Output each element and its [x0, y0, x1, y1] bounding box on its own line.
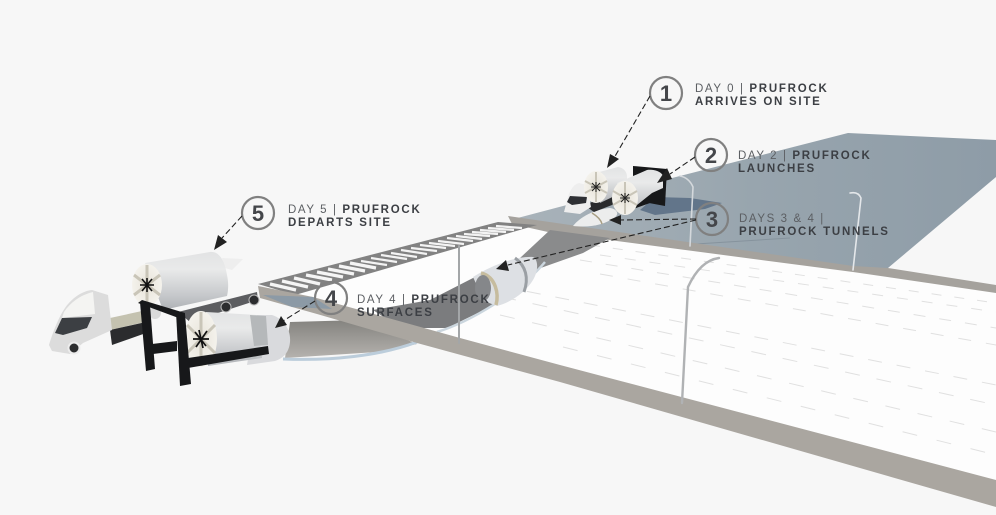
cutter spokes: [187, 312, 215, 366]
arrow 3b: [496, 220, 696, 271]
frame panel: [633, 166, 667, 206]
badge 4: [315, 282, 347, 314]
frame long beam: [188, 346, 269, 368]
truck chassis: [584, 190, 630, 212]
trench upper section: [373, 262, 535, 328]
trench edge highlight upper: [437, 262, 545, 332]
cutter head: [584, 171, 608, 203]
lamp posts: [459, 176, 861, 403]
badge 5: [242, 197, 274, 229]
machine body: [617, 170, 663, 213]
callout 1: [607, 77, 829, 168]
truck hood highlight: [62, 292, 95, 318]
label 2: LAUNCHES: [738, 163, 816, 175]
road surface: [262, 226, 996, 482]
lamp post on road: [682, 258, 719, 403]
arrow 2: [657, 157, 695, 183]
label 3: DAYS 3 & 4 |: [739, 213, 825, 225]
crosswalk: [258, 222, 537, 295]
cutter spokes: [585, 172, 607, 202]
arrow 4: [275, 301, 315, 328]
entrance tube: [573, 208, 617, 227]
curb along launch site: [508, 216, 996, 293]
callout 2: [657, 139, 872, 183]
ring: [250, 315, 268, 346]
badge 2: 2: [705, 143, 717, 168]
badge 3: 3: [706, 207, 718, 232]
cutter hub: [591, 182, 601, 192]
label 4: SURFACES: [357, 307, 434, 319]
badge 4: 4: [325, 286, 338, 311]
label 5: DEPARTS SITE: [288, 217, 392, 229]
arrow 1: [607, 96, 650, 168]
badge 1: [650, 77, 682, 109]
tube ring: [481, 273, 497, 305]
truck cab: [564, 183, 591, 214]
frame top bar: [138, 300, 185, 320]
frame rear leg: [140, 302, 155, 371]
cutter hub: [140, 278, 154, 292]
shadow patch: [263, 295, 332, 309]
frame front leg: [176, 312, 191, 386]
platform faint tick: [680, 238, 790, 245]
trench lower section: [285, 320, 417, 358]
callout 4: [275, 282, 491, 328]
cutter spokes: [134, 265, 160, 305]
cutter spokes: [613, 182, 637, 214]
truck cab: [49, 290, 112, 354]
lamp post on platform right: [850, 193, 861, 270]
tunnel trench: [283, 230, 610, 359]
platform: launch site: [510, 133, 996, 270]
cutter hub: [193, 330, 209, 348]
cutter head: [612, 181, 638, 215]
arrow 5: [214, 216, 242, 250]
entrance tube ring: [592, 213, 602, 224]
machine body: [206, 312, 262, 366]
reception frame: [138, 300, 269, 386]
cutter head: [185, 311, 217, 367]
trailer wheel: [221, 302, 231, 312]
tail: [222, 258, 243, 270]
Prufrock 2 in launch frame: [612, 170, 663, 215]
truck wheel: [68, 342, 80, 354]
machine body: [592, 167, 627, 203]
tunnel entrance tube on platform: [573, 208, 617, 227]
badge 5: 5: [252, 201, 264, 226]
bottom sidewalk: [258, 286, 996, 507]
badge 2: [695, 139, 727, 171]
launch site shadow: [640, 197, 722, 215]
crosswalk strip: [258, 222, 537, 295]
truck windshield: [567, 196, 587, 205]
badge 1: 1: [660, 81, 672, 106]
label 1: DAY 0 | PRUFROCK: [695, 83, 829, 95]
tube ring 2: [515, 258, 526, 292]
Prufrock 5 departing on truck: [49, 252, 259, 354]
Prufrock 1 with truck: [564, 167, 630, 214]
lane markings: [470, 245, 996, 455]
label 3: PRUFROCK TUNNELS: [739, 226, 890, 238]
label 5: DAY 5 | PRUFROCK: [288, 204, 422, 216]
label 2: DAY 2 | PRUFROCK: [738, 150, 872, 162]
frame base: [615, 190, 664, 212]
Prufrock 4 surfacing: [185, 311, 290, 367]
tunnelling machine in trench: [473, 257, 537, 306]
launch frame: [615, 166, 667, 212]
trailer wheel 3: [149, 307, 161, 319]
label 4: DAY 4 | PRUFROCK: [357, 294, 491, 306]
tube front: [475, 275, 491, 301]
truck windshield: [55, 317, 92, 335]
cutter head: [132, 264, 162, 306]
crosswalk stripes near: [270, 263, 376, 290]
trailer wheel 2: [249, 295, 259, 305]
collar: [247, 315, 290, 365]
crosswalk stripes far: [361, 226, 522, 265]
label 1: ARRIVES ON SITE: [695, 96, 822, 108]
tube body: [473, 257, 537, 306]
trailer front dark: [110, 322, 146, 345]
frame cross beam: [152, 341, 177, 354]
trailer front light: [110, 311, 145, 330]
callout 5: [214, 197, 422, 250]
trench upper wedge: [520, 230, 610, 270]
machine body: [145, 252, 228, 310]
trailer rear deck: [178, 292, 258, 322]
badge 3: [696, 203, 728, 235]
trench edge highlight: [283, 342, 417, 359]
lamp post on platform left: [680, 176, 693, 246]
cutter hub: [620, 193, 630, 203]
lamp post near crosswalk: [458, 246, 460, 343]
callout 3: [496, 203, 890, 271]
arrow 3a: [609, 215, 696, 225]
